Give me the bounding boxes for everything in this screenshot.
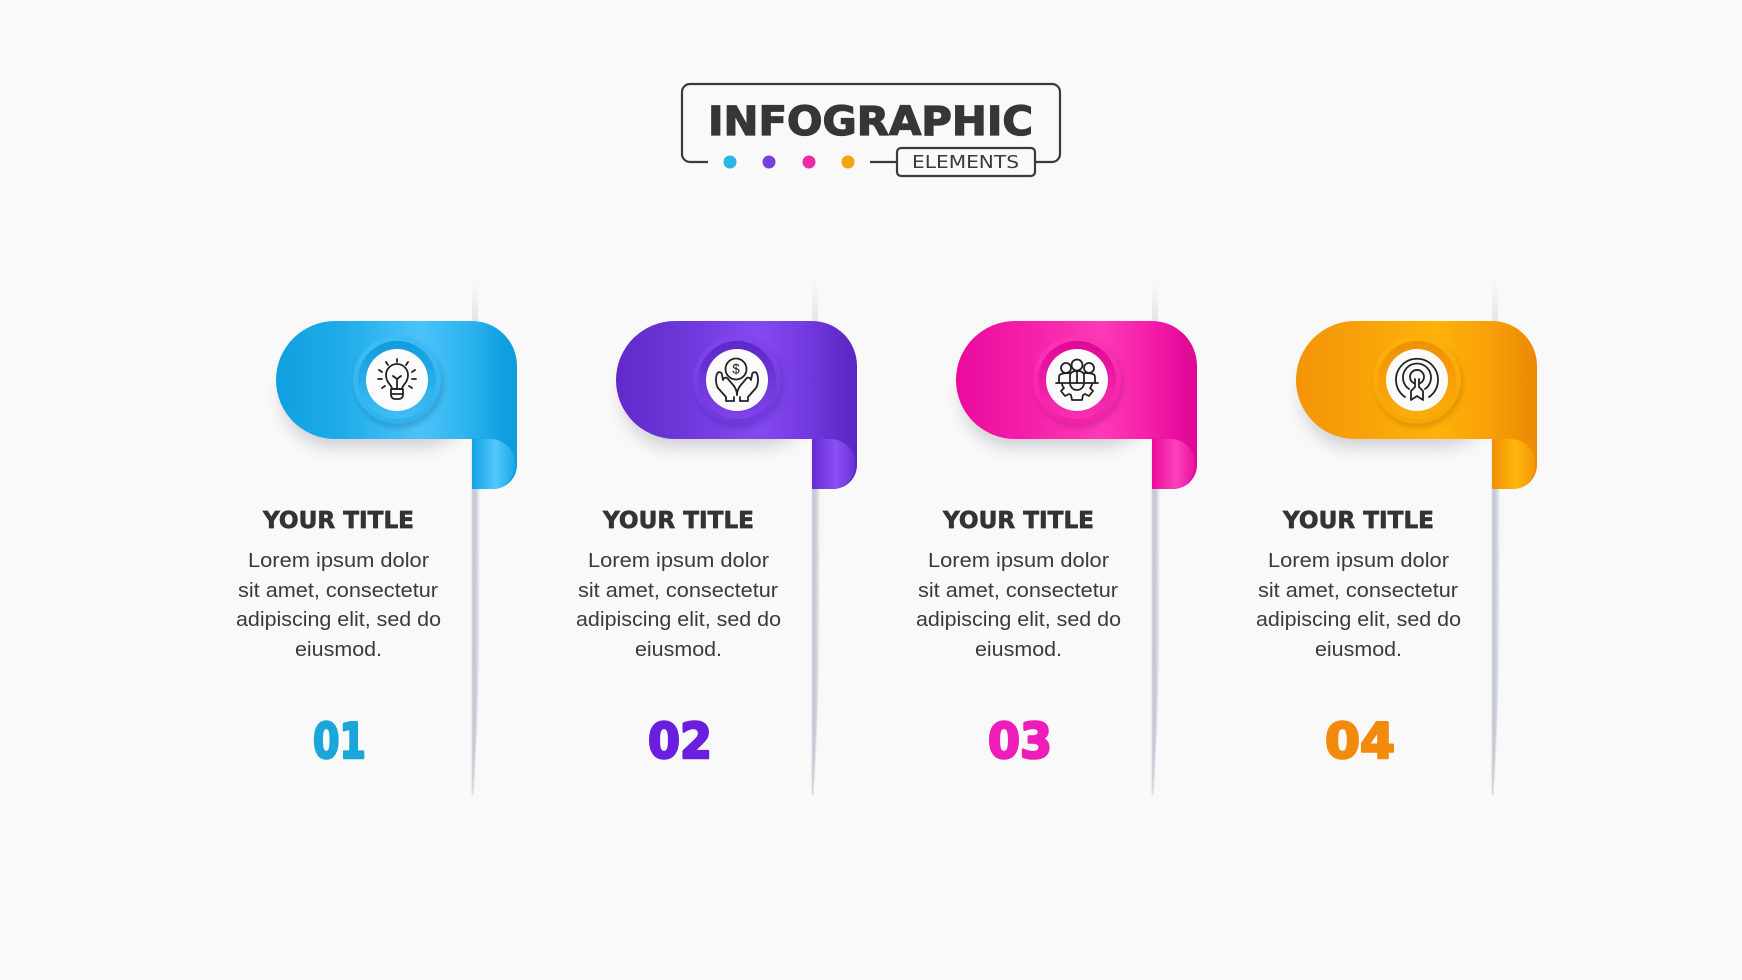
body text: adipiscing elit, sed do xyxy=(236,609,441,631)
body text: Lorem ipsum dolor xyxy=(588,550,769,572)
title: YOUR TITLE xyxy=(1282,506,1434,534)
body text: adipiscing elit, sed do xyxy=(916,609,1121,631)
elements tag: ELEMENTS xyxy=(912,153,1019,173)
body text: sit amet, consectetur xyxy=(578,580,778,602)
body text: sit amet, consectetur xyxy=(238,580,438,602)
icon: team with gear xyxy=(1056,360,1098,400)
icon badge xyxy=(353,336,443,428)
divider shadow xyxy=(1152,280,1160,795)
body text: eiusmod. xyxy=(635,639,722,661)
ribbon shadow xyxy=(282,345,472,447)
body text: sit amet, consectetur xyxy=(918,580,1118,602)
header frame xyxy=(682,84,1060,162)
ribbon shadow xyxy=(962,345,1152,447)
body text: eiusmod. xyxy=(295,639,382,661)
body text xyxy=(916,550,1121,661)
icon: hands holding coin: $ xyxy=(732,362,740,376)
panel: step 04 xyxy=(1256,280,1537,795)
ribbon xyxy=(1296,321,1537,489)
number 03: 03 xyxy=(988,713,1052,770)
panel: step 03 xyxy=(916,280,1197,795)
number 02: 02 xyxy=(648,713,712,770)
body text: Lorem ipsum dolor xyxy=(1268,550,1449,572)
icon badge xyxy=(693,336,783,428)
ribbon shadow xyxy=(1302,345,1492,447)
ribbon shadow xyxy=(622,345,812,447)
icon: target with ribbon xyxy=(1396,359,1438,400)
title: YOUR TITLE xyxy=(602,506,754,534)
body text xyxy=(236,550,441,661)
body text xyxy=(576,550,781,661)
body text: adipiscing elit, sed do xyxy=(576,609,781,631)
title: YOUR TITLE xyxy=(262,506,414,534)
body text: Lorem ipsum dolor xyxy=(248,550,429,572)
divider shadow xyxy=(472,280,480,795)
ribbon xyxy=(956,321,1197,489)
body text: eiusmod. xyxy=(1315,639,1402,661)
title: YOUR TITLE xyxy=(942,506,1094,534)
header: infographic elements badge xyxy=(682,84,1060,176)
icon badge xyxy=(1373,336,1463,428)
divider shadow xyxy=(812,280,820,795)
number 04: 04 xyxy=(1325,713,1395,770)
icon badge xyxy=(1033,336,1123,428)
elements tag xyxy=(897,148,1035,176)
divider shadow xyxy=(1492,280,1500,795)
body text: sit amet, consectetur xyxy=(1258,580,1458,602)
colour dots xyxy=(724,156,854,168)
ribbon xyxy=(276,321,517,489)
icon: light bulb xyxy=(378,359,416,399)
heading: infographic: INFOGRAPHIC xyxy=(708,99,1033,145)
number 01: 01 xyxy=(313,713,366,770)
panel: step 02 xyxy=(576,280,857,795)
body text: Lorem ipsum dolor xyxy=(928,550,1109,572)
body text: eiusmod. xyxy=(975,639,1062,661)
body text xyxy=(1256,550,1461,661)
ribbon xyxy=(616,321,857,489)
body text: adipiscing elit, sed do xyxy=(1256,609,1461,631)
panel: step 01 xyxy=(236,280,517,795)
